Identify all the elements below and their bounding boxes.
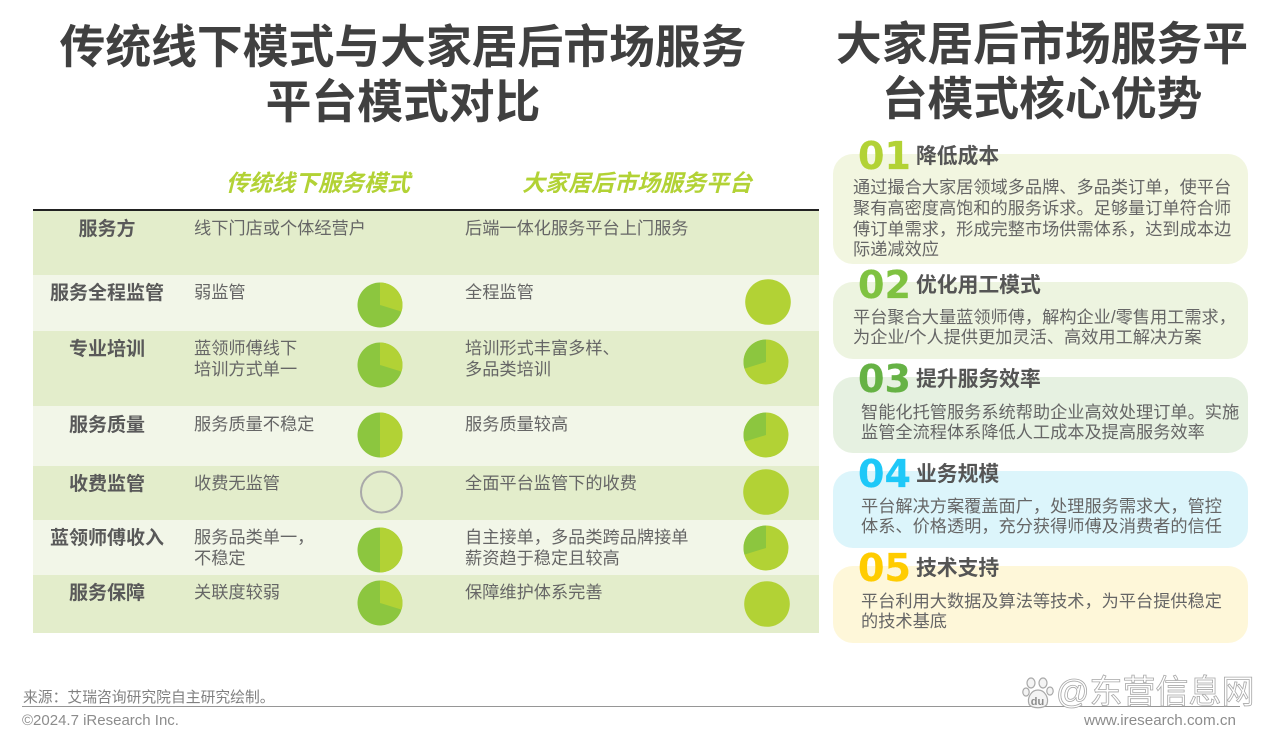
platform text: 服务质量较高 xyxy=(465,414,568,434)
platform text: 全程监管 xyxy=(465,282,534,302)
pie: platform fees xyxy=(743,469,789,515)
offline text: 弱监管 xyxy=(194,282,246,302)
card text: 平台利用大数据及算法等技术，为平台提供稳定 xyxy=(861,590,1222,610)
watermark text: @东营信息网 xyxy=(1056,673,1254,710)
card 03 xyxy=(833,377,1248,453)
row label: 收费监管 xyxy=(69,474,145,495)
card text: 通过撮合大家居领域多品牌、多品类订单，使平台 xyxy=(853,177,1231,197)
pie: platform quality xyxy=(744,412,788,458)
card 04 xyxy=(833,471,1248,548)
title: core advantages: 台模式核心优势 xyxy=(882,74,1202,125)
row label: 服务质量 xyxy=(69,415,145,436)
title: comparison: 平台模式对比 xyxy=(266,77,540,128)
row label: 服务方 xyxy=(78,219,136,240)
pie: offline training xyxy=(358,342,402,388)
title: comparison xyxy=(60,22,746,128)
title: comparison: 传统线下模式与大家居后市场服务 xyxy=(60,22,746,73)
footer rule xyxy=(22,706,1240,707)
card 05 xyxy=(833,566,1248,643)
number 03: 03 xyxy=(858,357,911,401)
number 04: 04 xyxy=(858,452,911,496)
card text: 监管全流程体系降低人工成本及提高服务效率 xyxy=(861,422,1205,442)
platform text: 多品类培训 xyxy=(465,359,551,379)
offline text: 服务品类单一， xyxy=(194,527,314,547)
number 02: 02 xyxy=(858,263,911,307)
card title 03: 提升服务效率 xyxy=(916,368,1041,391)
website: www.iresearch.com.cn xyxy=(1084,712,1236,729)
offline text: 不稳定 xyxy=(194,548,246,568)
column heading: offline: 传统线下服务模式 xyxy=(226,170,410,196)
source note: 来源：艾瑞咨询研究院自主研究绘制。 xyxy=(23,690,275,706)
offline text: 关联度较弱 xyxy=(194,582,280,602)
copyright: ©2024.7 iResearch Inc. xyxy=(22,712,179,729)
title: core advantages xyxy=(836,19,1248,125)
platform text: 薪资趋于稳定且较高 xyxy=(465,548,620,568)
row: supervision xyxy=(33,275,819,331)
card text xyxy=(853,177,1231,259)
platform text: 后端一体化服务平台上门服务 xyxy=(465,218,688,238)
offline text: 蓝领师傅线下 xyxy=(194,338,297,358)
platform text: 保障维护体系完善 xyxy=(465,582,603,602)
row: fees xyxy=(33,466,819,520)
platform text xyxy=(465,527,688,568)
card text xyxy=(861,496,1222,536)
card text: 平台聚合大量蓝领师傅，解构企业/零售用工需求， xyxy=(853,306,1236,326)
pie: platform guarantee xyxy=(744,581,790,627)
pie: platform training xyxy=(744,340,788,384)
offline text: 线下门店或个体经营户 xyxy=(194,218,366,238)
offline text xyxy=(194,527,314,568)
platform text: 全面平台监管下的收费 xyxy=(465,473,637,493)
card title 04: 业务规模 xyxy=(916,463,999,486)
row: service provider xyxy=(33,211,819,275)
number 05: 05 xyxy=(858,546,911,590)
card 01 xyxy=(833,154,1248,264)
offline text xyxy=(194,338,297,379)
platform text xyxy=(465,338,620,379)
icon: watermark paw: du xyxy=(1031,696,1044,708)
card text xyxy=(853,306,1236,347)
title: core advantages: 大家居后市场服务平 xyxy=(836,19,1248,70)
card text xyxy=(861,590,1222,631)
card text: 际递减效应 xyxy=(853,239,939,259)
row label: 蓝领师傅收入 xyxy=(50,528,164,549)
card title 02: 优化用工模式 xyxy=(916,274,1041,297)
pie: platform income xyxy=(744,526,788,570)
pie: offline income xyxy=(358,528,402,572)
platform text: 培训形式丰富多样、 xyxy=(465,338,620,358)
card text: 聚有高密度高饱和的服务诉求。足够量订单符合师 xyxy=(853,198,1231,218)
icon: watermark paw xyxy=(1022,677,1054,708)
column heading: platform: 大家居后市场服务平台 xyxy=(522,170,752,196)
card title 05: 技术支持 xyxy=(916,557,999,580)
offline text: 收费无监管 xyxy=(194,473,280,493)
row: income xyxy=(33,520,819,575)
pie: offline quality xyxy=(358,412,402,458)
card text: 傅订单需求，形成完整市场供需体系，达到成本边 xyxy=(853,219,1231,239)
pie: offline fees xyxy=(361,472,402,512)
card text: 平台解决方案覆盖面广，处理服务需求大，管控 xyxy=(861,496,1222,516)
offline text: 服务质量不稳定 xyxy=(194,414,314,434)
card text: 的技术基底 xyxy=(861,611,947,631)
number 01: 01 xyxy=(858,134,911,178)
offline text: 培训方式单一 xyxy=(194,359,297,379)
row label: 服务保障 xyxy=(69,583,145,604)
pie: platform supervision xyxy=(745,279,791,325)
row label: 服务全程监管 xyxy=(50,283,164,304)
row: guarantee xyxy=(33,575,819,633)
platform text: 自主接单，多品类跨品牌接单 xyxy=(465,527,688,547)
card text: 智能化托管服务系统帮助企业高效处理订单。实施 xyxy=(861,402,1239,422)
row label: 专业培训 xyxy=(69,339,145,360)
pie: offline supervision xyxy=(358,282,402,328)
row: training xyxy=(33,331,819,406)
row: quality xyxy=(33,406,819,466)
card title 01: 降低成本 xyxy=(916,145,999,168)
card text: 体系、价格透明，充分获得师傅及消费者的信任 xyxy=(861,516,1222,536)
panel: comparison table xyxy=(33,209,819,633)
card 02 xyxy=(833,282,1248,359)
card text xyxy=(861,402,1239,442)
pie: offline guarantee xyxy=(358,580,402,626)
card text: 为企业/个人提供更加灵活、高效用工解决方案 xyxy=(853,327,1202,347)
